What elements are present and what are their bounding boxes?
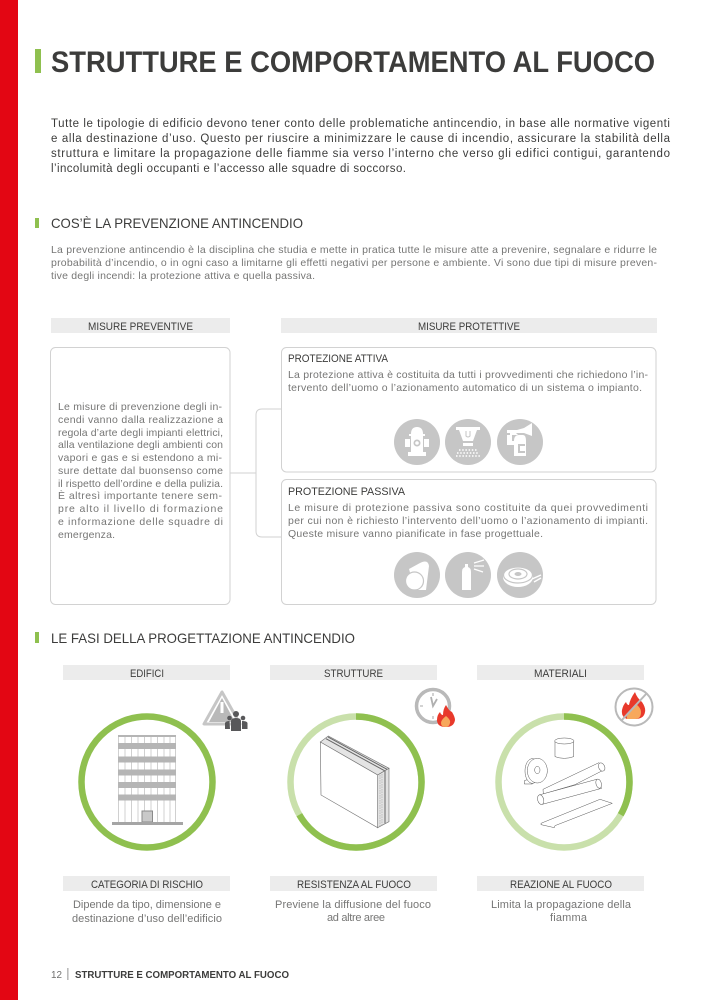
text: resistenza al fuoco: Previene la diffusione del fuoco xyxy=(275,899,431,911)
text: protezione passiva: Queste misure vanno pianificate in fase progettuale. xyxy=(288,528,543,540)
intro paragraph: l’incolumità degli occupanti e l’accesso alle squadre di soccorso. xyxy=(51,163,406,175)
illustration: building xyxy=(112,735,183,825)
ring: edifici xyxy=(82,716,212,848)
text: reazione al fuoco: Limita la propagazione della xyxy=(491,899,632,911)
footer: 12 xyxy=(51,969,62,981)
panel: protezione passiva xyxy=(282,480,656,604)
panel: misure preventive: pre alto il livello di formazione xyxy=(58,503,223,515)
illustration: wall section xyxy=(320,736,389,828)
heading: protezione passiva: PROTEZIONE PASSIVA xyxy=(288,486,406,498)
header: reazione al fuoco: REAZIONE AL FUOCO xyxy=(510,879,612,891)
illustration: materials xyxy=(524,738,612,828)
header: edifici: EDIFICI xyxy=(130,668,164,680)
ring: strutture xyxy=(290,716,422,848)
icon: insulation roll xyxy=(394,552,440,598)
header: materiali xyxy=(477,665,644,680)
panel: misure preventive: e informazione delle squadre di xyxy=(58,516,223,528)
icon: sprinkler xyxy=(445,419,491,465)
header: strutture: STRUTTURE xyxy=(324,668,383,680)
panel: misure preventive: sure dettate dal buonsenso come xyxy=(58,465,223,477)
text: categoria di rischio: Dipende da tipo, dimensione e xyxy=(73,899,221,911)
footer: STRUTTURE E COMPORTAMENTO AL FUOCO xyxy=(75,970,289,981)
header: materiali: MATERIALI xyxy=(534,668,587,680)
icon: no flame xyxy=(616,688,652,726)
header: misure preventive xyxy=(51,318,230,333)
header: resistenza al fuoco xyxy=(270,876,437,891)
panel: misure preventive: alla ventilazione degli ambienti con xyxy=(58,439,223,451)
text: protezione passiva xyxy=(288,502,648,540)
header: strutture xyxy=(270,665,437,680)
icon: clock and flame xyxy=(416,690,455,727)
text: protezione attiva xyxy=(288,369,648,394)
header: edifici xyxy=(63,665,230,680)
text: categoria di rischio: destinazione d’uso dell’edificio xyxy=(72,913,222,925)
icon: hydrant xyxy=(394,419,440,465)
heading: design phases: LE FASI DELLA PROGETTAZIONE ANTINCENDIO xyxy=(51,630,355,646)
panel: misure preventive: vapori e gas e si estendono a mi- xyxy=(58,452,222,464)
header: categoria di rischio xyxy=(63,876,230,891)
title: STRUTTURE E COMPORTAMENTO AL FUOCO xyxy=(51,46,655,79)
text: protezione passiva: Le misure di protezione passiva sono costituite da quei provvedimenti xyxy=(288,502,648,514)
text: resistenza al fuoco: ad altre aree xyxy=(327,912,385,924)
prevention paragraph: La prevenzione antincendio è la disciplina che studia e mette in pratica tutte le misure atte a prevenire, segnalare e ridurre le xyxy=(51,244,657,256)
header: categoria di rischio: CATEGORIA DI RISCHIO xyxy=(91,879,203,891)
column: materiali xyxy=(477,665,652,924)
text: reazione al fuoco: fiamma xyxy=(550,912,588,924)
panel: protezione attiva xyxy=(282,348,656,472)
heading: protezione attiva: PROTEZIONE ATTIVA xyxy=(288,353,389,365)
panel: misure preventive: emergenza. xyxy=(58,529,115,541)
column: edifici xyxy=(63,665,248,925)
text: resistenza al fuoco xyxy=(275,899,431,924)
prevention paragraph: probabilità d’incendio, o in ogni caso a limitarne gli effetti negativi per persone e ambiente. Vi sono due tipi di misure preven- xyxy=(51,257,658,269)
text: protezione attiva: La protezione attiva è costituita da tutti i provvedimenti che richiedono l’in- xyxy=(288,369,648,381)
panel: misure preventive xyxy=(50,348,230,604)
red side band xyxy=(0,0,18,1000)
panel: misure preventive: il rispetto dell’ordine e della pulizia. xyxy=(58,478,223,490)
icon: intumescent collar xyxy=(497,552,543,598)
text: protezione passiva: per cui non è richiesto l’intervento dell’uomo o l’azionamento di impianti. xyxy=(288,515,648,527)
prevention paragraph: tive degli incendi: la protezione attiva e quella passiva. xyxy=(51,270,315,282)
intro paragraph: e alla destinazione d’uso. Questo per riuscire a minimizzare le cause di incendio, assicurare la stabilità della xyxy=(51,133,671,145)
prevention paragraph xyxy=(51,244,658,282)
intro paragraph xyxy=(51,118,671,175)
icon: extinguisher xyxy=(497,419,543,465)
panel: misure preventive: regola d’arte degli impianti elettrici, xyxy=(58,427,223,439)
panel: misure preventive: cendi vanno dalla realizzazione a xyxy=(58,414,223,426)
header: misure preventive: MISURE PREVENTIVE xyxy=(88,321,193,333)
connector bracket xyxy=(230,409,281,537)
text: categoria di rischio xyxy=(72,899,222,925)
icon: warning and people xyxy=(204,692,248,731)
header: misure protettive: MISURE PROTETTIVE xyxy=(418,321,520,333)
panel: misure preventive: Le misure di prevenzione degli in- xyxy=(58,401,222,413)
intro paragraph: Tutte le tipologie di edificio devono tener conto delle problematiche antincendio, in base alle normative vigenti xyxy=(51,118,670,130)
ring: materiali xyxy=(498,716,630,848)
header: misure protettive xyxy=(281,318,657,333)
panel: misure preventive: È altresì importante tenere sem- xyxy=(58,489,222,502)
icon: spray can xyxy=(445,552,491,598)
heading: prevention: COS’È LA PREVENZIONE ANTINCENDIO xyxy=(51,215,303,231)
text: reazione al fuoco xyxy=(491,899,632,924)
column: strutture xyxy=(270,665,455,924)
text: protezione attiva: tervento dell’uomo o l’azionamento automatico di un sistema o impianto. xyxy=(288,382,642,394)
header: reazione al fuoco xyxy=(477,876,644,891)
header: resistenza al fuoco: RESISTENZA AL FUOCO xyxy=(297,879,411,891)
intro paragraph: struttura e limitare la propagazione delle fiamme sia verso l’interno che verso gli edifici contigui, garantendo xyxy=(51,148,670,160)
